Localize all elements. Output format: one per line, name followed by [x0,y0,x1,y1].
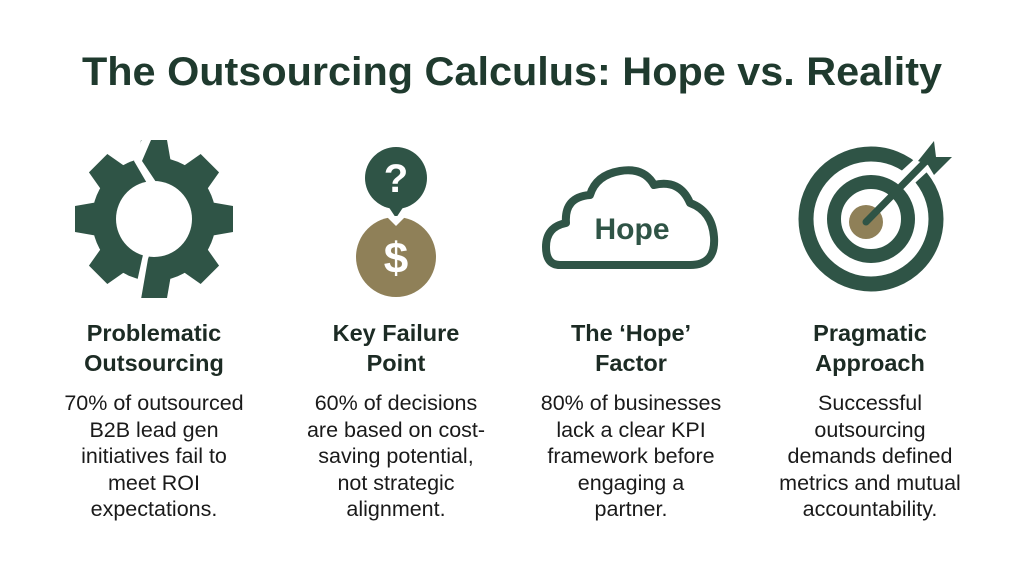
column: key failure point: Point [367,350,425,376]
column: pragmatic approach: Approach [815,350,925,376]
column: problematic outsourcing [64,320,244,521]
column: pragmatic approach: Successful [818,391,922,415]
column: key failure point: Key Failure [333,320,459,346]
column: pragmatic approach: Pragmatic [813,320,927,346]
column: hope factor: engaging a [578,470,684,494]
icon: question and coin: ? [384,157,408,201]
icon: question and coin: $ [384,234,408,283]
column: key failure point: not strategic [337,470,455,494]
column: problematic outsourcing: initiatives fail to [81,444,227,468]
column: key failure point: saving potential, [318,444,474,468]
column: pragmatic approach: metrics and mutual [779,470,961,494]
column: hope factor: The ‘Hope’ [571,320,691,346]
column: key failure point: are based on cost- [307,418,485,442]
column: problematic outsourcing: Problematic [87,320,221,346]
icon: target with arrow [798,141,952,292]
icon: broken gear [75,140,233,298]
column: pragmatic approach: accountability. [803,497,937,521]
column: hope factor: Factor [595,350,667,376]
column: problematic outsourcing: B2B lead gen [89,418,219,442]
column: problematic outsourcing: Outsourcing [84,350,224,376]
column: hope factor: 80% of businesses [541,391,721,415]
icon: hope cloud [542,166,718,269]
column: key failure point [307,320,485,521]
title: The Outsourcing Calculus: Hope vs. Reality [82,50,943,94]
column: pragmatic approach: demands defined [788,444,952,468]
icon: question and coin [356,147,436,297]
column: hope factor [541,320,721,521]
column: key failure point: 60% of decisions [315,391,477,415]
column: hope factor: partner. [595,497,667,521]
column: key failure point: alignment. [346,497,446,521]
column: pragmatic approach [779,320,961,521]
column: hope factor: framework before [547,444,715,468]
column: pragmatic approach: outsourcing [814,418,926,442]
column: problematic outsourcing: meet ROI [108,470,200,494]
column: problematic outsourcing: expectations. [91,497,217,521]
column: problematic outsourcing: 70% of outsourced [64,391,244,415]
column: hope factor: lack a clear KPI [556,418,706,442]
icon: hope cloud: Hope [594,213,670,246]
